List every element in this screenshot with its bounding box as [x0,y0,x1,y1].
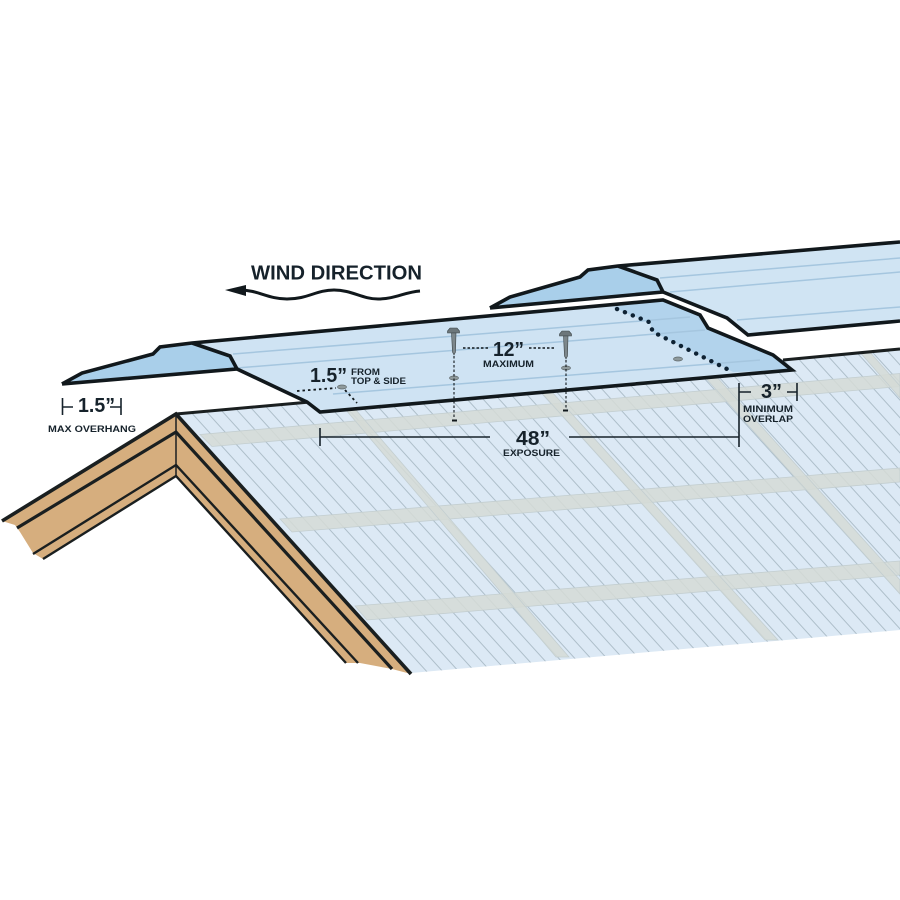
wind direction heading: WIND DIRECTION [251,262,422,284]
main ridge cap sheet [62,300,792,412]
measurement: fastener from top and side [297,365,406,403]
screw: left fastener [448,328,460,420]
measurement: 3 inch minimum overlap: MINIMUM [743,404,793,415]
measurement: 12 inch maximum: 12” [493,339,524,361]
measurement: 48 inch exposure: EXPOSURE [503,448,560,459]
arrow: wind direction [225,285,420,299]
roof fascia wood trim [2,414,411,674]
measurement: max overhang [48,395,136,435]
upper ridge cap sheet [490,242,900,335]
measurement: 12 inch maximum: MAXIMUM [483,359,534,370]
measurement: 48 inch exposure: 48” [516,428,550,450]
dotted hidden overlap edge [617,309,733,372]
measurement: 3 inch minimum overlap [739,381,797,447]
measurement: max overhang: 1.5” [78,395,115,417]
measurement: max overhang: MAX OVERHANG [48,424,136,435]
fastener washer [674,357,682,361]
measurement: 3 inch minimum overlap: OVERLAP [743,414,794,425]
measurement: fastener from top and side: FROM [351,367,380,378]
measurement: 3 inch minimum overlap: 3” [761,381,782,403]
measurement: 48 inch exposure [320,428,739,459]
roof panels [180,350,900,673]
measurement: fastener from top and side: 1.5” [310,365,347,387]
screw: right fastener [560,331,572,410]
measurement: fastener from top and side: TOP & SIDE [351,376,406,387]
measurement: 12 inch maximum [463,339,555,370]
roof top edge line [176,349,900,414]
